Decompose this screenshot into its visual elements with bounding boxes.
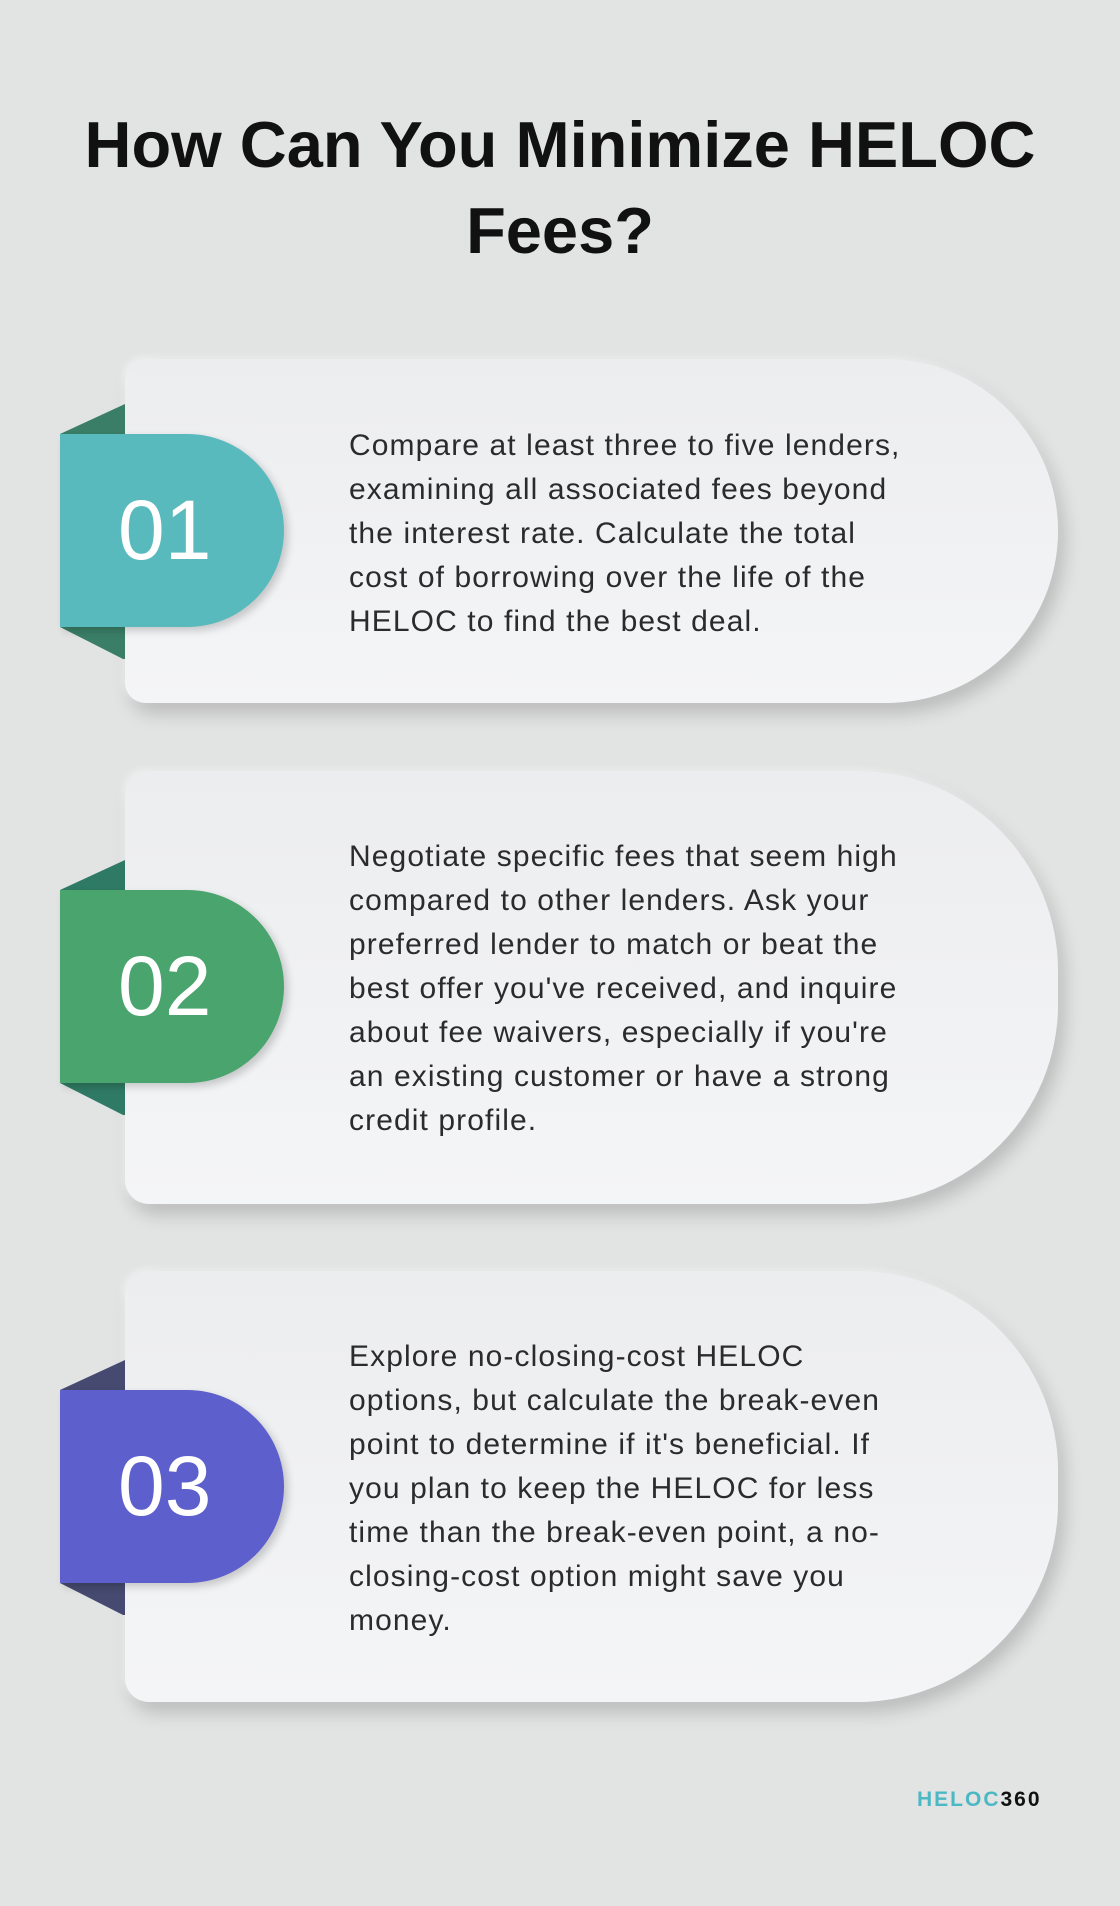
card 1: [125, 359, 1058, 703]
text 2: Negotiate specific fees that seem high: [349, 840, 898, 873]
text 2: [349, 840, 898, 1137]
text 1: the interest rate. Calculate the total: [349, 517, 856, 550]
text 3: time than the break-even point, a no-: [349, 1516, 880, 1549]
title: How Can You Minimize HELOC: [84, 108, 1035, 181]
text 2: best offer you've received, and inquire: [349, 972, 897, 1005]
text 3: you plan to keep the HELOC for less: [349, 1472, 874, 1505]
text 1: Compare at least three to five lenders,: [349, 429, 900, 462]
text 3: point to determine if it's beneficial. If: [349, 1428, 870, 1461]
tab 02: [60, 860, 292, 1115]
text 2: an existing customer or have a strong: [349, 1060, 890, 1093]
card 3: [125, 1271, 1058, 1702]
card 2: [125, 771, 1058, 1204]
logo: HELOC360: [917, 1788, 1042, 1811]
text 2: compared to other lenders. Ask your: [349, 884, 869, 917]
text 3: Explore no-closing-cost HELOC: [349, 1340, 804, 1373]
tab 02: 02: [118, 939, 211, 1033]
tab 01: 01: [118, 483, 211, 577]
text 1: [349, 429, 900, 638]
text 3: options, but calculate the break-even: [349, 1384, 880, 1417]
tab 01: [60, 404, 292, 659]
title: Fees?: [466, 194, 654, 267]
title: [84, 108, 1035, 267]
text 3: [349, 1340, 880, 1637]
text 2: about fee waivers, especially if you're: [349, 1016, 888, 1049]
text 1: HELOC to find the best deal.: [349, 605, 762, 638]
text 3: closing-cost option might save you: [349, 1560, 845, 1593]
tab 03: [60, 1360, 292, 1615]
text 1: cost of borrowing over the life of the: [349, 561, 866, 594]
text 1: examining all associated fees beyond: [349, 473, 887, 506]
text 3: money.: [349, 1604, 452, 1637]
text 2: credit profile.: [349, 1104, 537, 1137]
text 2: preferred lender to match or beat the: [349, 928, 878, 961]
tab 03: 03: [118, 1439, 211, 1533]
